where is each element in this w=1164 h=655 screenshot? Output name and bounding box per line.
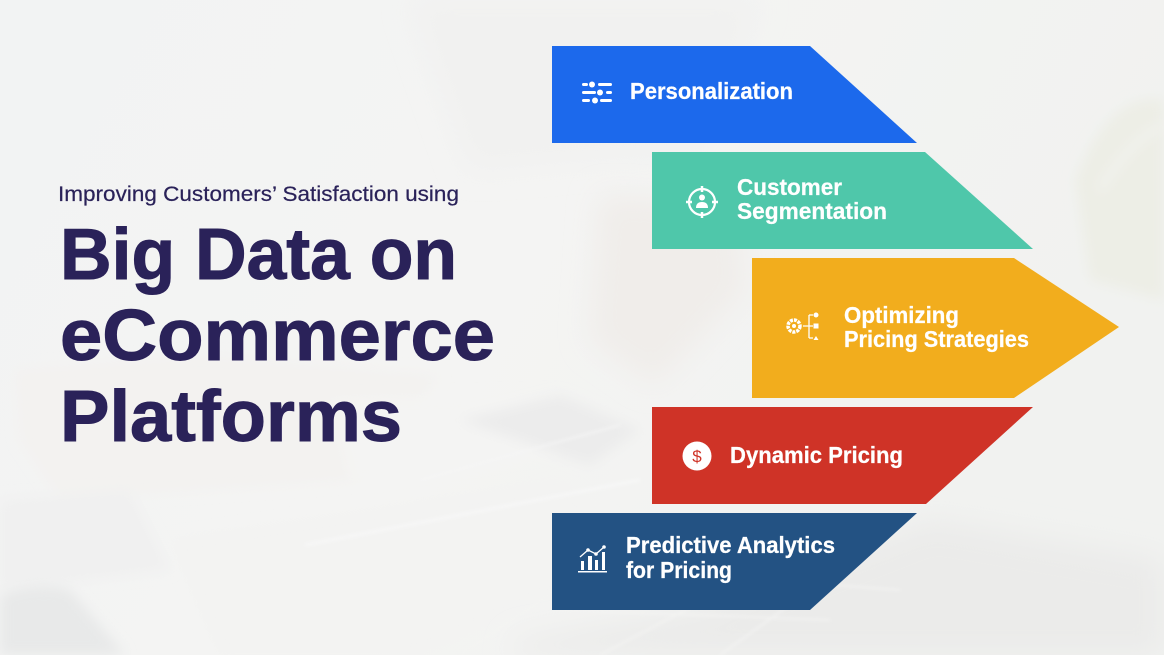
subtitle: Improving Customers’ Satisfaction using (58, 183, 459, 206)
icon: dollar coin (682, 442, 712, 470)
title: eCommerce (60, 296, 495, 376)
panel: customer segmentation (652, 152, 1033, 249)
panel: predictive analytics: Predictive Analytics (626, 532, 835, 558)
panel: optimizing pricing strategies: Optimizing (844, 302, 959, 328)
icon: target person (686, 186, 718, 218)
panel: personalization: Personalization (630, 78, 793, 104)
panel: optimizing pricing strategies (752, 258, 1119, 398)
icon: sliders (582, 82, 612, 104)
panel: customer segmentation: Segmentation (737, 198, 887, 224)
title (60, 215, 495, 457)
panel: optimizing pricing strategies: Pricing Strategies (844, 326, 1029, 352)
panel: dynamic pricing: Dynamic Pricing (730, 442, 903, 468)
panel: personalization (552, 46, 917, 143)
icon: gear with branches (788, 312, 818, 340)
panel: dynamic pricing (652, 407, 1033, 504)
title: Platforms (60, 377, 402, 457)
icon: bar chart with trend (578, 545, 607, 572)
title: Big Data on (60, 215, 457, 295)
panel: customer segmentation: Customer (737, 174, 842, 200)
panel: predictive analytics: for Pricing (626, 557, 732, 583)
panel: predictive analytics (552, 513, 917, 610)
icon: dollar coin: $ (692, 447, 702, 466)
